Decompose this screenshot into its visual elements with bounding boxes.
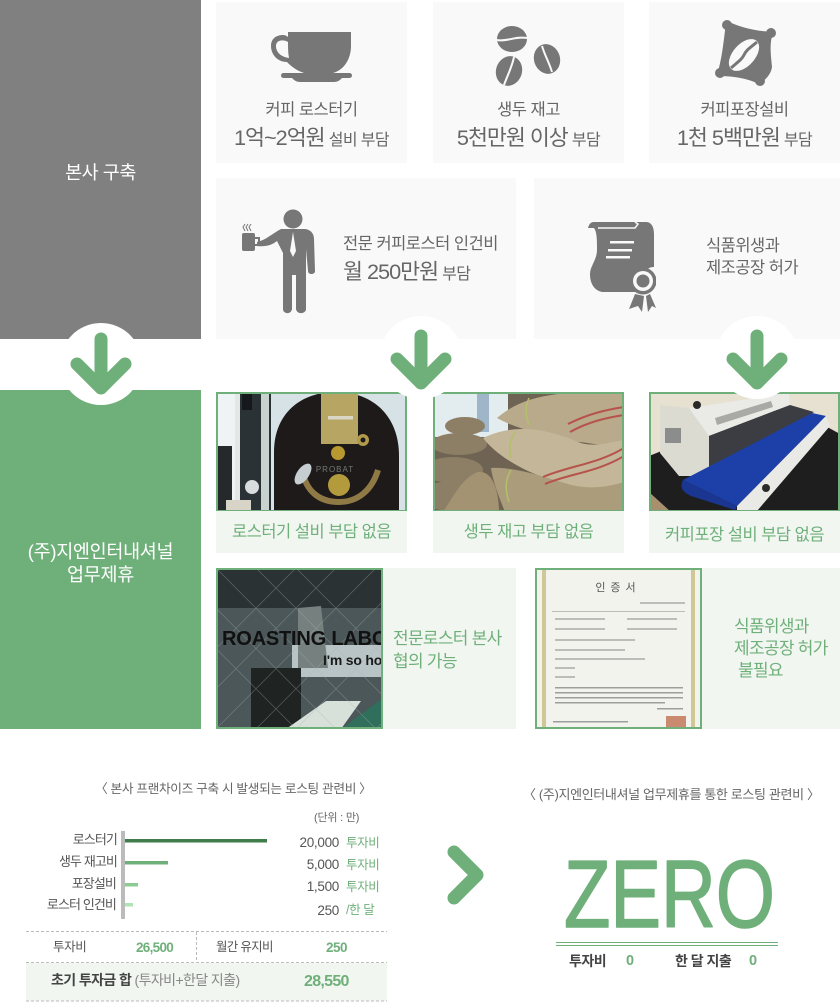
heading: franchise roasting cost: 〈 본사 프랜차이즈 구축 시 발생되는 로스팅 관련비 〉 xyxy=(95,782,372,796)
text: consultation available xyxy=(393,629,502,671)
value: packing: 1,500 xyxy=(307,879,339,894)
suffix: per month: /한 달 xyxy=(346,903,374,917)
double rule xyxy=(556,942,778,946)
text: consultation available: 전문로스터 본사 xyxy=(393,629,502,648)
photo: certificate xyxy=(535,568,702,729)
text: monthly label: 월간 유지비 xyxy=(216,940,273,954)
label: packing: 포장설비 xyxy=(72,876,116,891)
photo: roaster machine xyxy=(216,392,407,511)
icon: certificate xyxy=(588,222,656,312)
chart section: franchise cost xyxy=(26,782,387,1002)
card: food hygiene permit xyxy=(534,178,840,339)
text: permit not required: 제조공장 허가 xyxy=(734,639,828,658)
suffix: invest 2: 투자비 xyxy=(346,858,379,872)
photo: certificate: 인증서 xyxy=(595,581,641,594)
panel: headquarters build xyxy=(0,0,201,339)
text: packing cost: 커피포장설비 xyxy=(700,101,789,119)
text: green bean cost: 생두 재고 xyxy=(497,101,560,119)
heading: headquarters build: 본사 구축 xyxy=(65,162,136,183)
heading: partnership: 업무제휴 xyxy=(67,564,134,585)
caption: no bean cost: 생두 재고 부담 없음 xyxy=(464,523,593,541)
suffix: invest 1: 투자비 xyxy=(346,836,379,850)
heading: partnership roasting cost: 〈 (주)지엔인터내셔널 업무제휴를 통한 로스팅 관련비 〉 xyxy=(523,787,820,802)
heading: partnership: (주)지엔인터내셔널 xyxy=(28,541,173,562)
panel: partnership xyxy=(0,390,201,729)
caption: no bean cost xyxy=(433,511,624,553)
label: labor: 로스터 인건비 xyxy=(47,897,116,912)
text: green bean cost: 5천만원 이상 부담 xyxy=(457,125,600,150)
text: labor cost xyxy=(343,235,498,284)
text: permit not required: 불필요 xyxy=(738,661,783,680)
text: labor cost: 전문 커피로스터 인건비 xyxy=(343,235,498,253)
text: investment label: 투자비 xyxy=(53,940,86,954)
text: investment zero label: 투자비 xyxy=(569,953,606,969)
value: total: 28,550 xyxy=(304,973,349,990)
value: beans: 5,000 xyxy=(307,857,339,872)
text: roaster cost: 1억~2억원 설비 부담 xyxy=(234,125,389,150)
text: roaster cost xyxy=(234,101,390,150)
photo: packing conveyor xyxy=(649,392,840,511)
arrow: right down arrow xyxy=(726,330,788,399)
icon: coffee sack xyxy=(715,20,776,86)
panel: permit not needed xyxy=(535,568,840,729)
text: packing cost: 1천 5백만원 부담 xyxy=(677,125,812,150)
panel: roaster consultation xyxy=(216,568,516,729)
value: monthly: 250 xyxy=(326,940,347,955)
value: roaster: 20,000 xyxy=(300,835,339,850)
text: permit xyxy=(706,237,798,277)
value: investment zero: 0 xyxy=(626,953,634,969)
label: green beans: 생두 재고비 xyxy=(59,854,117,869)
arrow: middle down arrow xyxy=(390,330,452,398)
section: partnership cost xyxy=(523,787,820,969)
caption: no packing cost xyxy=(649,511,840,553)
photo: roasting lab: I'm so ho xyxy=(323,652,382,668)
text: permit not required: 식품위생과 xyxy=(734,617,809,636)
photo: roasting lab: ROASTING LABO xyxy=(222,628,383,650)
label: roaster: 로스터기 xyxy=(73,832,117,847)
text: roaster cost: 커피 로스터기 xyxy=(265,101,358,119)
photo: roasting lab xyxy=(216,568,383,729)
value: monthly zero: 0 xyxy=(749,953,757,969)
icon: coffee beans xyxy=(496,26,560,86)
text: permit: 식품위생과 xyxy=(706,237,779,255)
photo: green bean sacks xyxy=(433,392,624,511)
text: packing cost xyxy=(677,101,812,150)
text: labor cost: 월 250만원 부담 xyxy=(343,259,470,284)
value: labor: 250 xyxy=(317,903,339,918)
bar chart: cost bars xyxy=(121,831,267,919)
caption: no roaster cost xyxy=(216,511,407,553)
caption: no roaster cost: 로스터기 설비 부담 없음 xyxy=(232,523,391,541)
suffix: invest 3: 투자비 xyxy=(346,880,379,894)
icon: coffee cup xyxy=(271,32,352,82)
card: roaster labor xyxy=(216,178,516,339)
text: permit: 제조공장 허가 xyxy=(706,259,798,277)
arrow: chevron right xyxy=(448,846,484,904)
text: consultation available: 협의 가능 xyxy=(393,652,457,671)
icon: man with cup xyxy=(242,210,315,314)
text: total label: 초기 투자금 합 (투자비+한달 지출) xyxy=(51,972,240,988)
arrow: left down arrow xyxy=(68,323,134,405)
text: permit not required xyxy=(734,617,828,680)
heading: partnership xyxy=(28,541,173,585)
card: green bean stock xyxy=(433,2,624,163)
caption: no packing cost: 커피포장 설비 부담 없음 xyxy=(665,526,824,544)
text: unit: (단위 : 만) xyxy=(314,812,359,824)
value: investment: 26,500 xyxy=(136,940,173,955)
text: monthly zero label: 한 달 지출 xyxy=(675,953,731,969)
text: green bean cost xyxy=(457,101,600,150)
card: coffee roaster xyxy=(216,2,407,163)
photo: roaster machine: PROBAT xyxy=(316,465,354,474)
summary table lines xyxy=(26,931,387,1002)
card: packing equipment xyxy=(649,2,840,163)
